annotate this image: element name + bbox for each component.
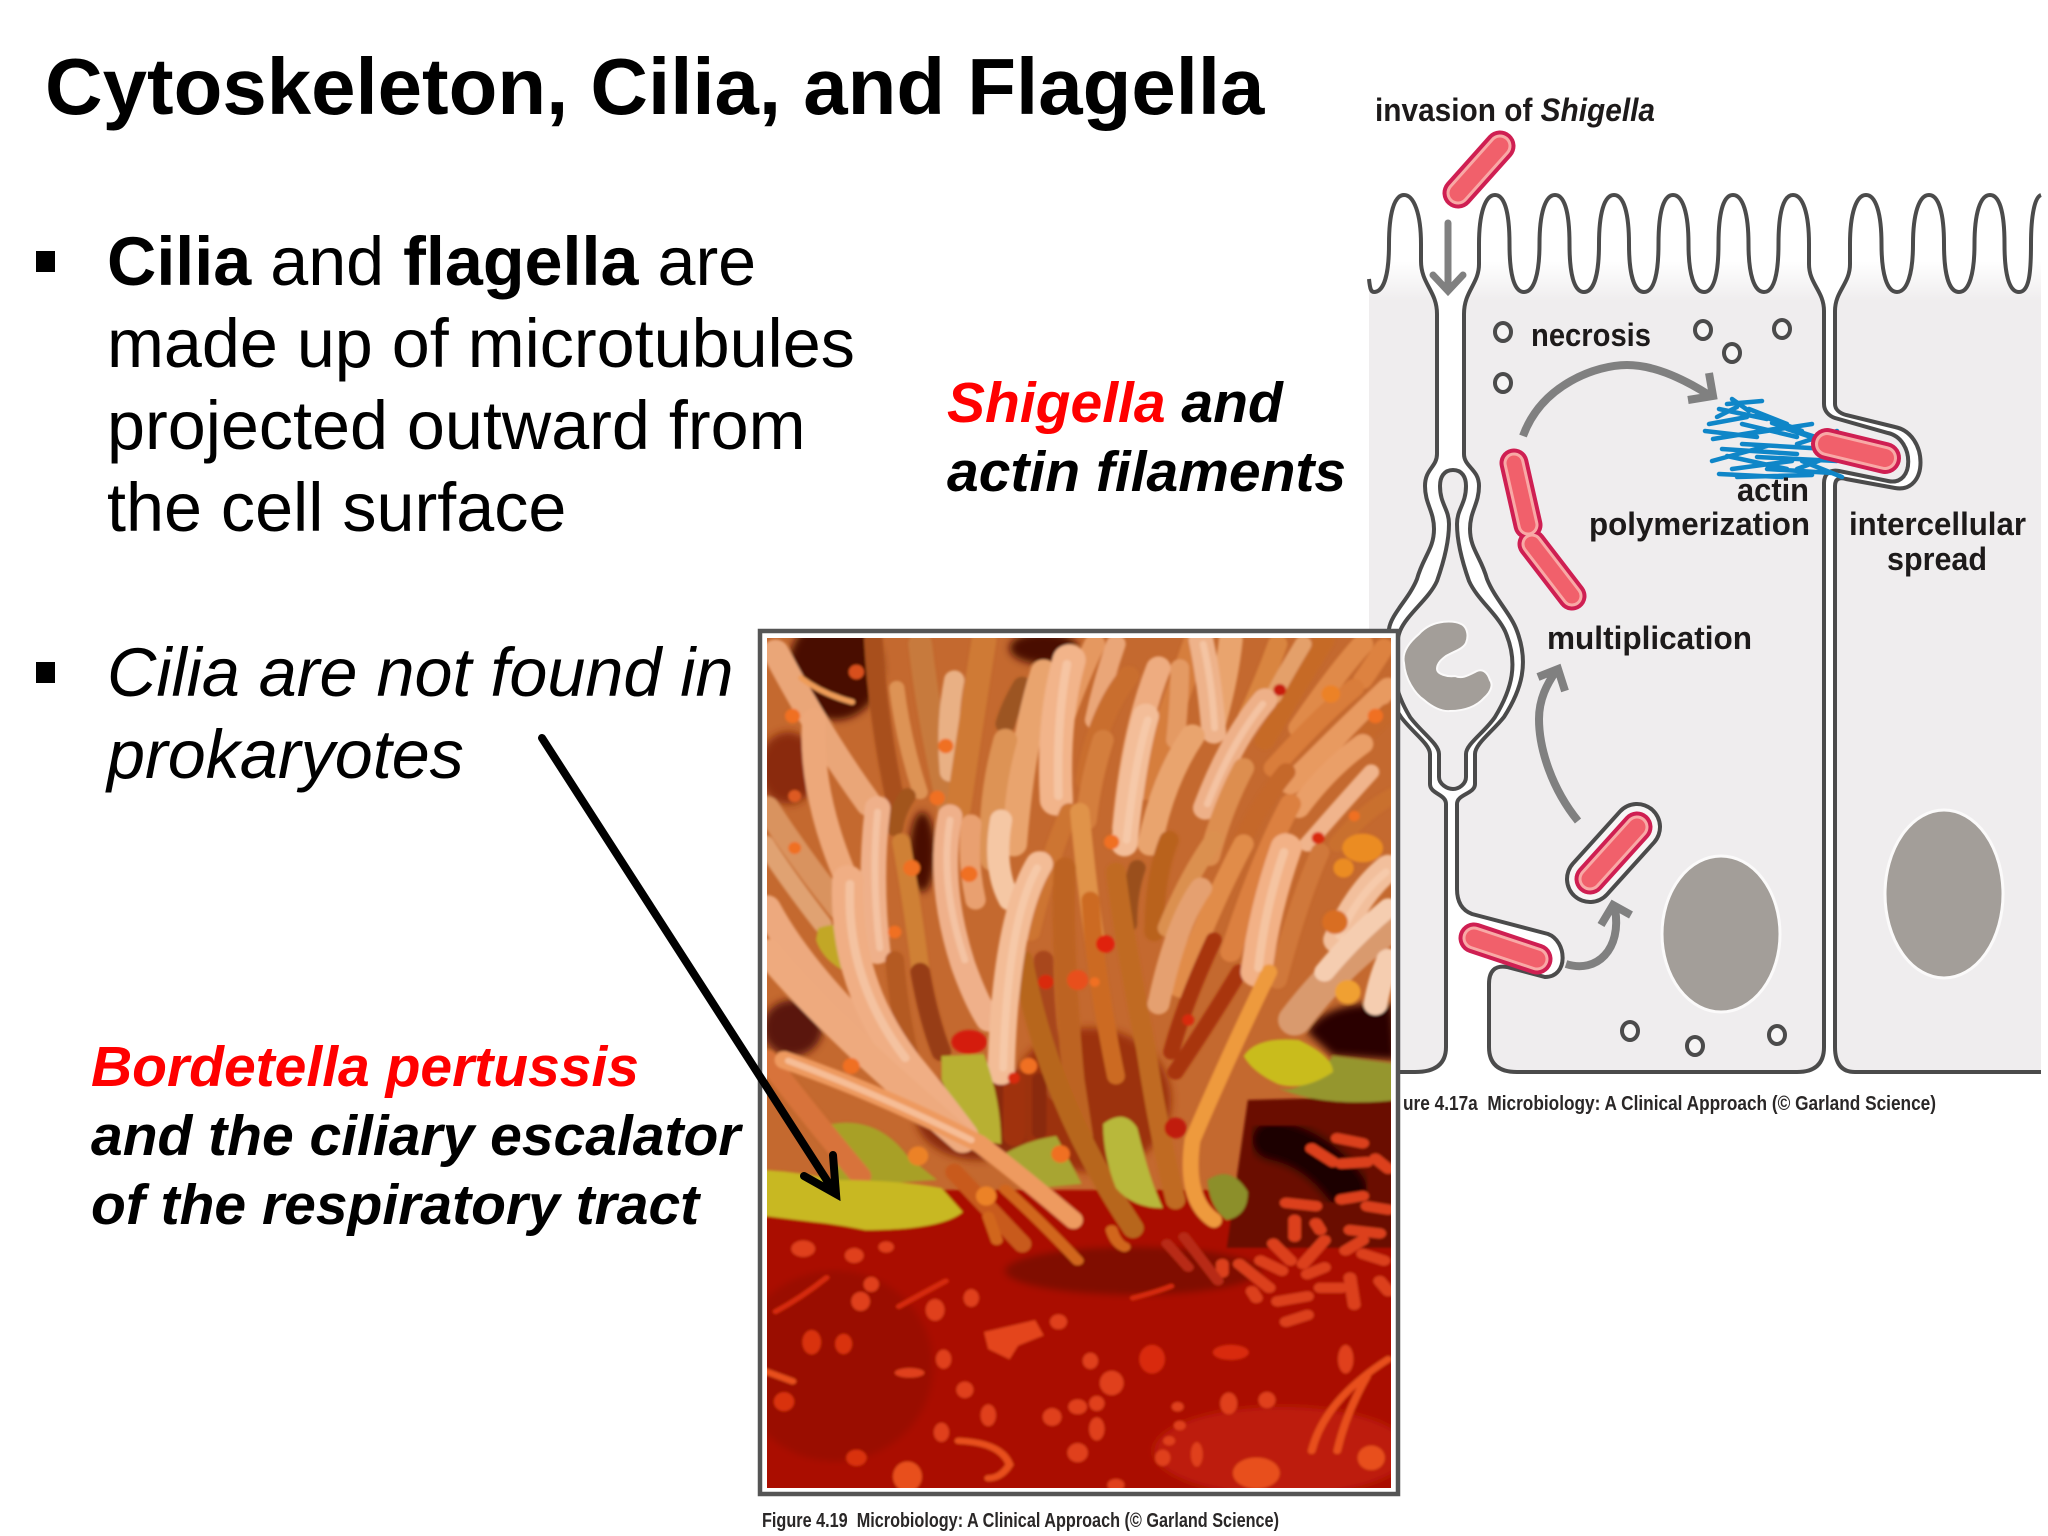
bacterium: entering [1458, 146, 1500, 193]
label: Bordetella pertussis: Bordetella pertussis [91, 1035, 639, 1099]
bullet text: cilia not in prokaryotes: Cilia are not found in [107, 635, 733, 711]
bullet text: cilia and flagella: made up of microtubules [107, 306, 855, 382]
epithelial cell 1 [1369, 195, 1446, 1072]
villi rods at lower right [988, 1138, 1388, 1322]
diagram: Shigella invasion of epithelial cells [1369, 92, 2041, 1115]
icon: macrophage nucleus [1404, 621, 1492, 711]
icon: cell 2 nucleus [1662, 856, 1780, 1012]
icon: actin filaments [1705, 399, 1842, 477]
arrow: to actin polymerization [1523, 365, 1713, 436]
necrosis vesicles [1495, 320, 1790, 1055]
epithelial cell 2 [1457, 195, 1908, 1072]
label: invasion of Shigella: invasion of Shigella [1375, 92, 1655, 128]
arrow: invasion downward [1433, 223, 1463, 291]
long sweeping cilia [767, 880, 1269, 1244]
caption: figure 4.19: Figure 4.19 Microbiology: A Clinical Approach (© Garland Science) [762, 1510, 1279, 1532]
cilia tuft [759, 616, 1397, 1248]
arrow: basal uptake [1566, 905, 1631, 966]
bullet text: cilia and flagella [36, 224, 855, 546]
label: actin polymerization: polymerization [1589, 506, 1810, 542]
lower epithelium: red surface [737, 1190, 1410, 1495]
bacteria behind long cilia [816, 925, 1082, 1188]
label: necrosis: necrosis [1531, 317, 1651, 353]
label: Shigella and actin filaments [947, 371, 1346, 504]
arrow: to multiplication [1538, 669, 1578, 821]
cilia highlights [850, 644, 1386, 1068]
yellow-green bacteria [765, 1039, 1397, 1230]
bullet text: cilia and flagella: projected outward from [107, 388, 805, 464]
label: actin polymerization [1589, 472, 1810, 542]
label: intercellular spread: spread [1887, 541, 1987, 577]
epithelial cell 3 [1835, 195, 2041, 1072]
bullet text: cilia not in prokaryotes: prokaryotes [105, 717, 464, 793]
bacterium: dividing pair [1514, 463, 1572, 596]
bacterium: in intercellular protrusion [1827, 444, 1885, 458]
bullet text: cilia and flagella: the cell surface [107, 470, 566, 546]
bacterium: in vacuole [1590, 827, 1637, 879]
arrow: to Bordetella pertussis [542, 738, 836, 1194]
label: Bordetella pertussis [91, 1035, 743, 1237]
label: intercellular spread [1849, 506, 2026, 577]
photo: cilia and Bordetella pertussis [767, 638, 1391, 1488]
back cilia [765, 640, 1393, 924]
label: actin polymerization: actin [1737, 472, 1809, 508]
icon: cell 3 nucleus [1885, 810, 2003, 978]
title: Cytoskeleton, Cilia, and Flagella [45, 42, 1265, 131]
label: Bordetella pertussis: and the ciliary escalator [91, 1104, 743, 1168]
label: multiplication: multiplication [1547, 620, 1752, 656]
label: Shigella and actin filaments: actin filaments [947, 440, 1346, 504]
label: intercellular spread: intercellular [1849, 506, 2026, 542]
photo frame [760, 631, 1398, 1494]
bullet text: cilia not in prokaryotes [36, 635, 733, 793]
secretion droplets [785, 665, 1383, 1206]
caption: figure 4.17a: ure 4.17a Microbiology: A Clinical Approach (© Garland Science) [1403, 1093, 1936, 1115]
bullet text: cilia and flagella: Cilia and flagella are [107, 224, 756, 300]
macrophage vacuole [1394, 470, 1512, 789]
bacterium: entering from basal side [1474, 938, 1537, 959]
label: Shigella and actin filaments: Shigella and [947, 371, 1284, 435]
middle cilia [873, 804, 1388, 1228]
label: Bordetella pertussis: of the respiratory tract [91, 1173, 701, 1237]
